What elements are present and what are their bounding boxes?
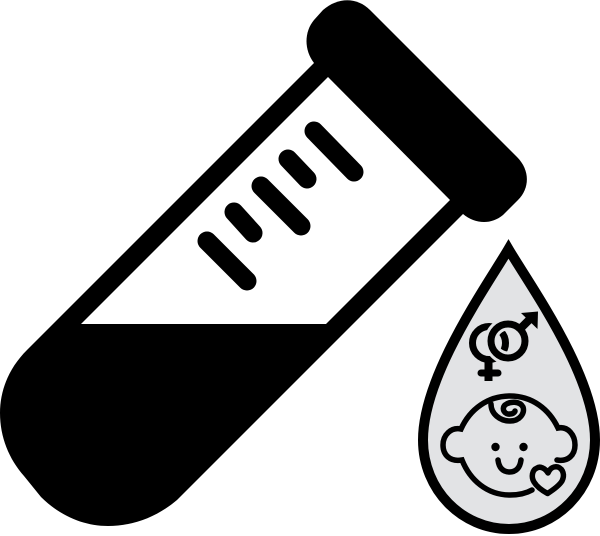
tube body with liquid xyxy=(0,57,470,526)
male symbol xyxy=(491,312,538,358)
hair curl xyxy=(491,402,523,421)
drop outline xyxy=(423,249,595,529)
empty tube interior xyxy=(81,77,450,324)
female symbol xyxy=(472,326,506,381)
icon: gender symbols xyxy=(472,312,538,381)
head and ears xyxy=(443,396,575,495)
smile xyxy=(498,460,521,472)
icon: baby face xyxy=(443,396,575,495)
icon: drop xyxy=(423,249,595,529)
tube cap xyxy=(306,0,527,222)
heart xyxy=(532,467,563,494)
measurement ticks xyxy=(207,131,354,281)
eyes xyxy=(491,443,528,451)
